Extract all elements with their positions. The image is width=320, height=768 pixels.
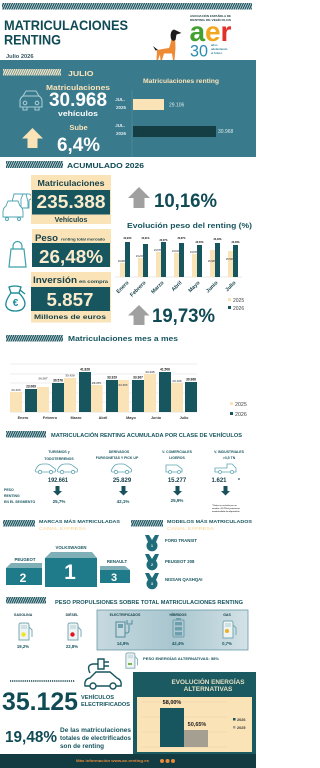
stat: electrificados: 35.125 bbox=[2, 688, 78, 716]
chart: evolucion peso: 26,07% bbox=[159, 239, 168, 242]
kpi: inversion: 5.857 bbox=[46, 290, 94, 310]
column: turismos: TODOTERRENOS bbox=[44, 457, 74, 461]
column: comerciales: 15.277 bbox=[168, 478, 187, 484]
heading: clase de vehiculos: MATRICULACIÓN RENTING ACUMULADA POR CLASE DE VEHÍCULOS bbox=[51, 431, 243, 439]
bar chart: alternativas: 2025 bbox=[237, 726, 245, 730]
logo: aer: e bbox=[205, 16, 221, 47]
icon: car bbox=[20, 91, 42, 110]
icon: gas bbox=[223, 621, 236, 638]
logo: aer: r bbox=[220, 16, 232, 47]
vehicle classes bbox=[4, 450, 245, 504]
row label: peso renting: RENTING bbox=[4, 494, 20, 498]
alternative energy weight: PESO ENERGÍAS ALTERNATIVAS: 58% bbox=[143, 656, 220, 661]
column: industriales: >3,5 TN bbox=[223, 456, 236, 460]
chart: evolucion peso: 25,59% bbox=[226, 258, 235, 261]
kpi: inversion bbox=[31, 272, 111, 322]
logo: aer: adelantando bbox=[211, 47, 228, 51]
stat: 19,48: son de renting bbox=[60, 744, 104, 750]
chart: evolucion peso: Enero bbox=[116, 280, 131, 295]
footer: Más información www.ae-renting.es bbox=[76, 759, 149, 763]
heading: marcas: MARCAS MÁS MATRICULADAS bbox=[39, 518, 120, 524]
column: derivados bbox=[96, 450, 139, 504]
kpi: matriculaciones bbox=[31, 175, 111, 224]
icon: money bag bbox=[6, 286, 25, 311]
chart: evolucion peso: Julio bbox=[224, 280, 238, 293]
julio hatch heading bbox=[3, 69, 94, 78]
chart: evolucion peso bbox=[115, 223, 252, 312]
bar chart: matriculaciones renting: JUL. bbox=[115, 97, 125, 102]
stat: 19,48: 19,48% bbox=[5, 729, 57, 746]
bar chart: matriculaciones renting: JUL. bbox=[115, 123, 125, 128]
icon: gasolina bbox=[19, 623, 32, 640]
chart: evolucion peso: Junio bbox=[205, 280, 220, 294]
title: RENTING bbox=[4, 32, 61, 48]
chart: evolucion peso: 24,57% bbox=[154, 249, 163, 252]
column: derivados: FURGONETAS Y PICK UP bbox=[96, 456, 139, 460]
stat: electrificados: ELECTRIFICADOS bbox=[81, 702, 131, 708]
row label: peso renting: PESO bbox=[4, 488, 14, 492]
julio total: 30.968 bbox=[49, 90, 107, 111]
chart: evolucion peso: 24,21% bbox=[136, 255, 145, 258]
bar chart: alternativas: 50,65% bbox=[188, 722, 206, 728]
bar chart: alternativas: 2026 bbox=[237, 718, 245, 722]
chart: evolucion peso: 26,48% bbox=[231, 241, 240, 244]
podium: 2 bbox=[20, 571, 27, 585]
column: industriales: * bbox=[238, 478, 240, 484]
kpi: peso: 26,48% bbox=[39, 247, 103, 267]
column: derivados: DERIVADOS bbox=[109, 450, 130, 454]
stat: 19,73: 19,73% bbox=[152, 306, 215, 327]
logo: aer: el futuro bbox=[211, 51, 222, 55]
model ranking: 2 bbox=[151, 563, 153, 567]
chart: evolucion peso: 2026 bbox=[233, 306, 244, 312]
chart: evolucion peso: 26,61% bbox=[141, 237, 150, 240]
propulsion types: 0,7% bbox=[222, 641, 232, 646]
dotted line bbox=[10, 680, 75, 682]
julio total: Matriculaciones bbox=[46, 83, 110, 92]
column: comerciales: LIGEROS bbox=[169, 456, 186, 460]
julio total: vehículos bbox=[58, 109, 98, 118]
bar chart: mes a mes: 41.506 bbox=[160, 368, 170, 372]
bar chart: mes a mes: 39.938 bbox=[145, 370, 155, 374]
heading: marcas: CANAL EXPRESA bbox=[39, 526, 87, 531]
page background bbox=[0, 0, 256, 768]
heading: clase de vehiculos bbox=[6, 431, 243, 439]
propulsion types: 14,9% bbox=[117, 641, 129, 646]
model ranking bbox=[145, 535, 202, 589]
model ranking: 1 bbox=[151, 544, 153, 548]
julio hatch heading: JULIO bbox=[68, 69, 94, 78]
propulsion types: GASOLINA bbox=[14, 613, 33, 617]
heading: propulsiones: PESO PROPULSIONES SOBRE TOTAL MATRICULACIONES RENTING bbox=[55, 600, 243, 606]
stat: 10,16: 10,16% bbox=[154, 191, 217, 212]
kpi: inversion: Millones de euros bbox=[34, 314, 106, 321]
chart: evolucion peso: 23,86% bbox=[118, 260, 127, 263]
column: turismos: TURISMOS y bbox=[48, 450, 70, 454]
bar chart: mes a mes: Marzo bbox=[71, 416, 82, 420]
column: comerciales bbox=[162, 450, 193, 503]
footnote bbox=[212, 504, 240, 513]
model ranking: FORD TRANSIT bbox=[165, 538, 197, 543]
bar chart: mes a mes: 41.828 bbox=[80, 368, 90, 372]
podium: PEUGEOT bbox=[14, 557, 36, 562]
podium: 1 bbox=[64, 561, 76, 584]
stat: 19,48: De las matriculaciones bbox=[60, 728, 132, 734]
bar chart: mes a mes bbox=[10, 364, 247, 420]
bar chart: mes a mes: Enero bbox=[18, 416, 29, 420]
heading: mes a mes bbox=[6, 335, 178, 343]
stat: 19,73 bbox=[128, 305, 215, 327]
podium: 3 bbox=[111, 572, 117, 584]
heading: propulsiones bbox=[6, 597, 243, 606]
bar chart: mes a mes: 26.567 bbox=[38, 376, 48, 380]
chart: evolucion peso: Evolución peso del renting (%) bbox=[127, 223, 252, 230]
panel: alternativas bbox=[97, 610, 248, 650]
kpi: peso: renting total mercado bbox=[61, 238, 105, 242]
propulsion types: ELECTRIFICADOS bbox=[110, 613, 141, 617]
stat: 19,48 bbox=[5, 728, 132, 750]
bar chart: mes a mes: Febrero bbox=[43, 416, 58, 420]
heading: acumulado bbox=[6, 161, 144, 170]
bar chart: matriculaciones renting: 30.968 bbox=[218, 129, 234, 135]
icon: bag bbox=[9, 242, 26, 267]
propulsion types: GAS bbox=[223, 613, 231, 617]
icon: electrificados bbox=[116, 620, 132, 637]
bar chart: mes a mes: 20.423 bbox=[11, 388, 21, 392]
logo: aer: ASOCIACIÓN ESPAÑOLA DE bbox=[190, 13, 231, 18]
kpi: inversion: en compra bbox=[79, 279, 109, 284]
heading: acumulado: ACUMULADO 2026 bbox=[67, 161, 144, 170]
propulsion types: 22,8% bbox=[66, 644, 78, 649]
propulsion types: DIÉSEL bbox=[66, 612, 79, 617]
icon: electric car bbox=[85, 659, 121, 689]
top hatch band bbox=[2, 3, 252, 10]
icon: cars bbox=[3, 194, 32, 220]
panel: evolucion energias bbox=[133, 672, 256, 754]
chart: evolucion peso: 24,61% bbox=[172, 250, 181, 253]
propulsion types bbox=[14, 612, 236, 649]
row label: peso renting: EN EL SEGMENTO bbox=[4, 500, 35, 504]
column: turismos: 192.661 bbox=[48, 478, 69, 484]
heading: modelos: MODELOS MÁS MATRICULADOS bbox=[167, 518, 252, 524]
panel: evolucion energias: ALTERNATIVAS bbox=[184, 686, 233, 693]
icon: dog bbox=[153, 30, 182, 60]
heading: modelos bbox=[131, 518, 252, 531]
bar chart: mes a mes: Mayo bbox=[126, 416, 137, 420]
chart: evolucion peso: 26,93% bbox=[123, 237, 132, 240]
chart: evolucion peso: 25,68% bbox=[208, 260, 217, 263]
kpi: peso: Peso bbox=[35, 233, 59, 243]
bar chart: alternativas: 58,00% bbox=[163, 700, 181, 706]
bar chart: mes a mes: Abril bbox=[99, 416, 107, 420]
column: derivados: 42,1% bbox=[117, 499, 129, 504]
column: turismos: 25,7% bbox=[53, 499, 65, 504]
bar chart: mes a mes: 28.375 bbox=[92, 381, 101, 385]
bar chart: mes a mes: 2026 bbox=[235, 412, 247, 418]
bar chart: mes a mes: Julio bbox=[180, 416, 189, 420]
propulsion types: 42,4% bbox=[172, 641, 184, 646]
bar chart: matriculaciones renting: 2025 bbox=[116, 105, 126, 110]
chart: evolucion peso: 26,49% bbox=[213, 238, 222, 241]
icon: diesel bbox=[68, 623, 81, 640]
alternative energy weight bbox=[126, 653, 220, 668]
logo: aer bbox=[190, 13, 232, 60]
model ranking: NISSAN QASHQAI bbox=[165, 577, 202, 582]
footnote: cambio >3,5 TN al pertenecer bbox=[212, 507, 240, 510]
logo: aer: años bbox=[211, 43, 218, 47]
column: industriales: V. INDUSTRIALES bbox=[214, 450, 245, 454]
stat: 19,48: totales de electrificados bbox=[60, 736, 132, 742]
julio change: Sube bbox=[69, 123, 88, 132]
chart: evolucion peso: 26,87% bbox=[177, 237, 186, 240]
bar chart: alternativas bbox=[137, 697, 252, 752]
column: derivados: 25.829 bbox=[113, 478, 132, 484]
julio change: 6,4% bbox=[57, 135, 100, 156]
column: comerciales: 25,9% bbox=[171, 498, 183, 503]
column: turismos bbox=[35, 450, 78, 504]
row label: peso renting bbox=[4, 488, 35, 504]
model ranking: 3 bbox=[151, 582, 153, 586]
logo: aer: 30 bbox=[190, 42, 208, 60]
chart: evolucion peso: Abril bbox=[171, 280, 184, 293]
title: MATRICULACIONES bbox=[4, 17, 128, 33]
bar chart: mes a mes: 30.968 bbox=[186, 378, 196, 382]
panel: evolucion energias: EVOLUCIÓN ENERGÍAS bbox=[172, 677, 245, 686]
panel: julio bbox=[0, 60, 256, 157]
icon: up arrow bbox=[22, 128, 43, 148]
column: comerciales: V. COMERCIALES bbox=[162, 450, 193, 454]
chart: evolucion peso: 26,50% bbox=[195, 241, 204, 244]
bar chart: matriculaciones renting bbox=[115, 79, 234, 157]
stat: electrificados: VEHÍCULOS bbox=[81, 693, 115, 701]
julio total bbox=[46, 83, 110, 118]
footnote: inmatriculado de adquisición bbox=[212, 510, 240, 513]
bar chart: mes a mes: 33.355 bbox=[118, 383, 128, 387]
stat: 10,16 bbox=[128, 187, 217, 212]
chart: evolucion peso: 24,67% bbox=[190, 251, 199, 254]
bar chart: matriculaciones renting: Matriculaciones renting bbox=[143, 79, 219, 85]
kpi: matriculaciones: Matriculaciones bbox=[38, 178, 105, 188]
heading: marcas bbox=[3, 518, 120, 531]
bar chart: mes a mes: 23.069 bbox=[26, 384, 36, 388]
bar chart: mes a mes: 33.329 bbox=[107, 376, 117, 380]
logo: aer: RENTING DE VEHÍCULOS bbox=[190, 17, 231, 22]
heading: mes a mes: Matriculaciones mes a mes bbox=[68, 336, 178, 343]
kpi: matriculaciones: 235.388 bbox=[36, 192, 106, 212]
column: industriales bbox=[211, 450, 245, 496]
chart: evolucion peso: 2025 bbox=[233, 298, 244, 304]
date: Julio 2026 bbox=[6, 54, 34, 60]
bar chart: mes a mes: 33.367 bbox=[133, 376, 143, 380]
kpi: matriculaciones: Vehículos bbox=[55, 217, 87, 224]
chart: evolucion peso: Marzo bbox=[150, 280, 166, 295]
podium bbox=[6, 545, 130, 587]
chart: evolucion peso: Febrero bbox=[129, 280, 148, 298]
heading: modelos: CANAL EXPRESA bbox=[167, 526, 215, 531]
kpi: inversion: Inversión bbox=[33, 275, 77, 285]
column: industriales: 1.621 bbox=[211, 478, 227, 484]
podium: VOLKSWAGEN bbox=[55, 545, 87, 550]
bar chart: matriculaciones renting: 2026 bbox=[116, 131, 126, 136]
footnote: * Datos en revisión por un bbox=[212, 504, 238, 507]
logo: aer: a bbox=[190, 16, 206, 47]
bar chart: mes a mes: 35.429 bbox=[65, 374, 75, 378]
bar chart: mes a mes: 2025 bbox=[235, 402, 247, 408]
propulsion types: HÍBRIDOS bbox=[169, 612, 187, 617]
bar chart: mes a mes: 29.106 bbox=[172, 379, 182, 383]
julio change bbox=[57, 123, 100, 156]
model ranking: PEUGEOT 208 bbox=[165, 559, 195, 564]
chart: evolucion peso: Mayo bbox=[188, 280, 202, 294]
bar chart: mes a mes: 30.576 bbox=[53, 378, 63, 382]
bar chart: mes a mes: Junio bbox=[151, 416, 162, 420]
icon: money bag: € bbox=[13, 298, 19, 309]
bar chart: matriculaciones renting: 29.106 bbox=[169, 102, 185, 108]
icon: hibridos bbox=[173, 618, 184, 637]
podium: RENAULT bbox=[107, 559, 127, 564]
kpi: peso bbox=[32, 229, 111, 267]
propulsion types: 19,2% bbox=[17, 644, 29, 649]
footer bbox=[0, 754, 256, 768]
title bbox=[4, 17, 128, 48]
stat: electrificados bbox=[2, 688, 131, 716]
